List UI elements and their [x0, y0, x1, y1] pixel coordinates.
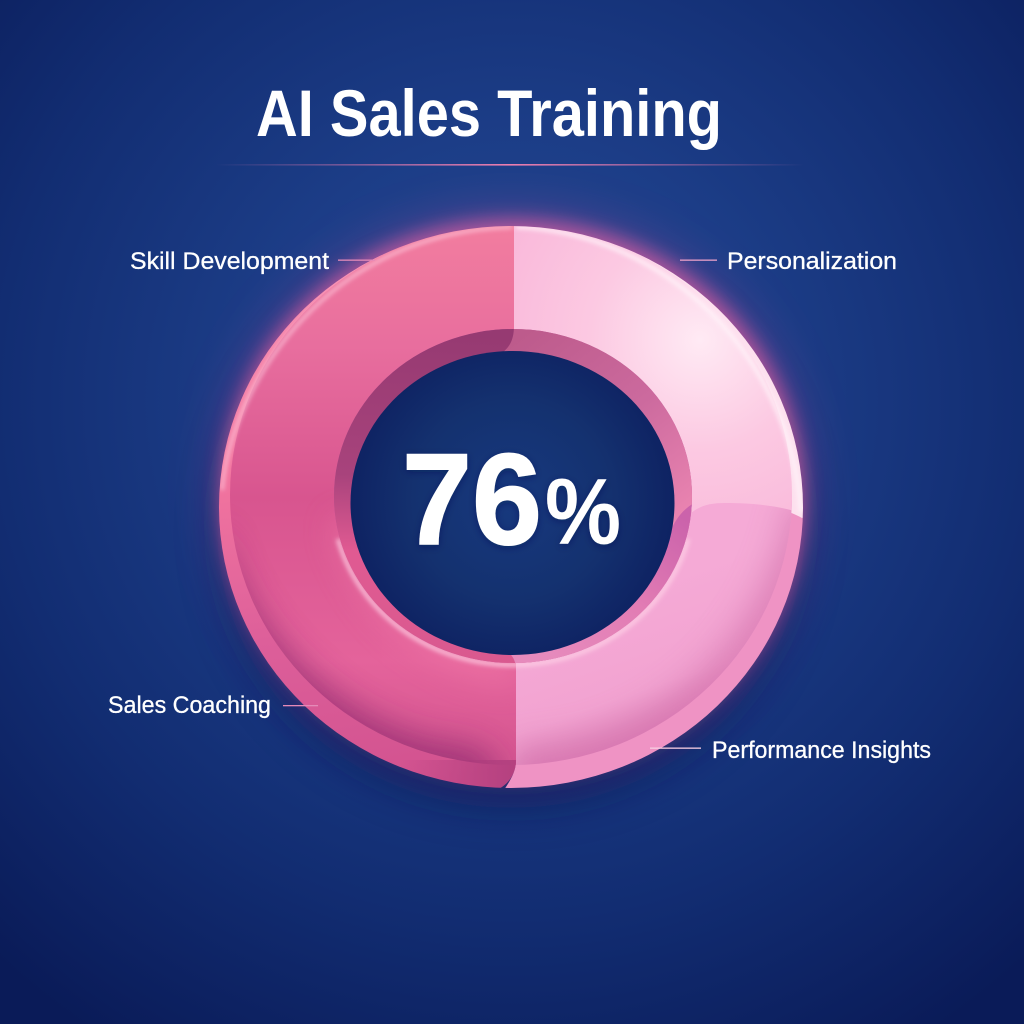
- label: skill development: Skill Development: [130, 248, 329, 275]
- segment: performance insights: [516, 502, 792, 750]
- bevel left: [330, 325, 516, 670]
- upper left rim highlight: [222, 227, 512, 490]
- percent sign: %: [545, 459, 621, 564]
- lower left shade: [234, 536, 506, 764]
- rim: left: [219, 246, 516, 788]
- bevel right: [504, 329, 692, 526]
- center value: [402, 426, 621, 572]
- donut chart: [200, 200, 820, 808]
- lower left tab: [430, 760, 516, 788]
- ground shadow: [217, 248, 805, 808]
- wide glow: [221, 218, 805, 762]
- inner bevel: [330, 325, 700, 670]
- segment: personalization: [514, 226, 792, 513]
- label: performance insights: Performance Insights: [712, 737, 931, 764]
- bevel lower right: [512, 504, 692, 663]
- label: sales coaching: Sales Coaching: [108, 692, 271, 719]
- segment: skill development and sales coaching: [230, 226, 516, 765]
- inner bright edge: [338, 536, 498, 674]
- upper right rim highlight: [516, 227, 801, 512]
- title divider: [215, 164, 805, 166]
- center hole: [350, 351, 674, 655]
- rim: upper right: [622, 247, 803, 518]
- 76: 76: [402, 426, 542, 572]
- rim: right: [505, 513, 803, 788]
- outer glow: [221, 219, 805, 775]
- title: AI Sales Training: [256, 76, 722, 150]
- label: personalization: Personalization: [727, 248, 897, 275]
- ring segments: [219, 226, 803, 788]
- inner lower highlight: [338, 539, 688, 665]
- lower right shade: [516, 508, 792, 765]
